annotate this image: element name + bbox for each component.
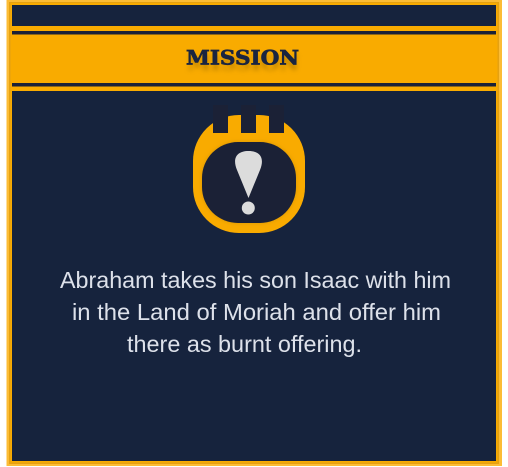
icon: binder tabs bbox=[213, 105, 284, 133]
heading: mission: MISSION bbox=[186, 46, 299, 70]
panel: top navy strip bbox=[12, 5, 496, 26]
panel: main navy body bbox=[12, 91, 496, 461]
icon: calendar alert bbox=[193, 105, 305, 233]
panel: title band bbox=[12, 31, 496, 86]
text block: mission description: in the Land of Moriah and offer him bbox=[72, 299, 441, 325]
text block: mission description: there as burnt offering. bbox=[127, 331, 362, 357]
text block: mission description bbox=[60, 267, 451, 357]
text block: mission description: Abraham takes his son Isaac with him bbox=[60, 267, 451, 293]
icon: exclamation mark bbox=[235, 151, 262, 214]
heading: mission: MISSION bbox=[187, 51, 299, 75]
